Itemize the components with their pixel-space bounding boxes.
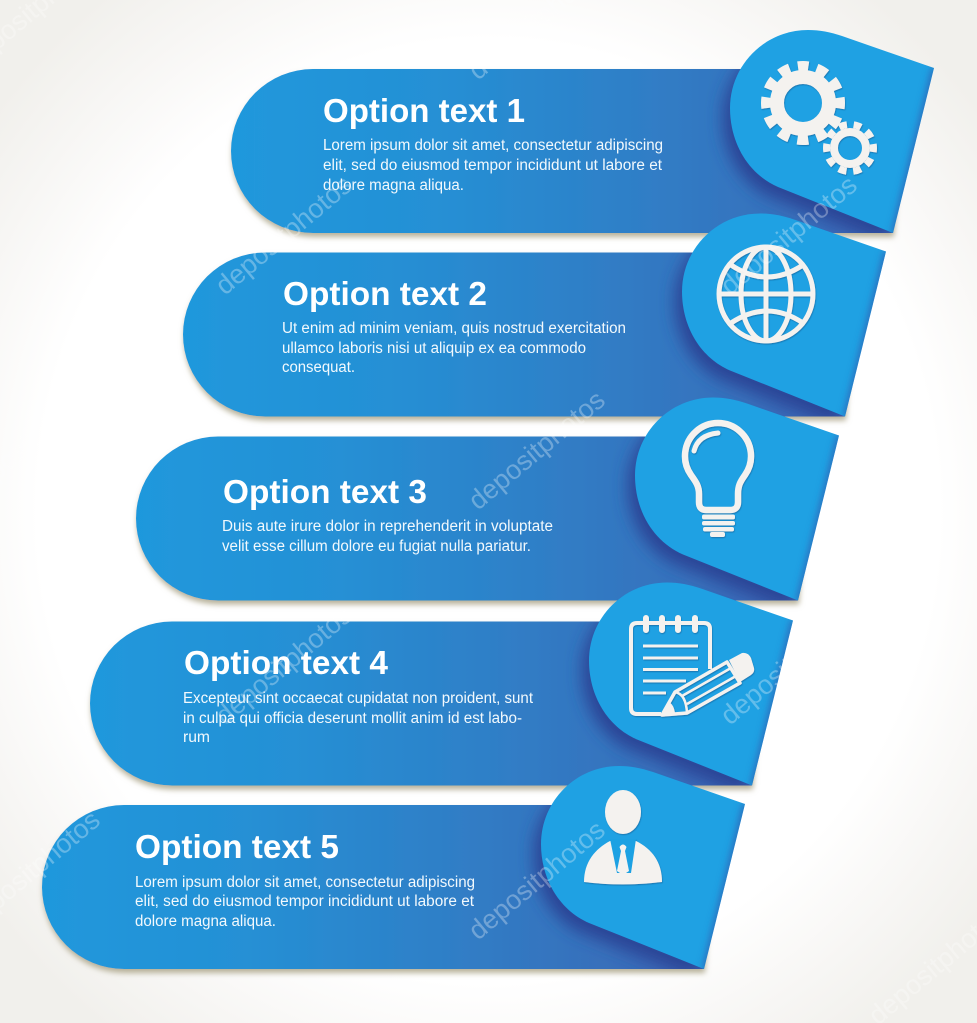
ribbon and tag 2: [183, 214, 888, 426]
body text 1: dolore magna aliqua.: [323, 177, 464, 194]
body text 4: rum: [183, 729, 210, 746]
body text 5: elit, sed do eiusmod tempor incididunt ut labore et: [135, 893, 475, 910]
body text 2: Ut enim ad minim veniam, quis nostrud exercitation: [282, 320, 626, 337]
body text 5: dolore magna aliqua.: [135, 913, 276, 930]
title 1: Option text 1: [323, 92, 525, 129]
title 4: Option text 4: [184, 644, 389, 681]
row 1: option text 1: [231, 30, 936, 243]
title 5: Option text 5: [135, 828, 339, 865]
body text 1: [323, 137, 663, 194]
body text 5: Lorem ipsum dolor sit amet, consectetur adipiscing: [135, 874, 475, 891]
body text 3: velit esse cillum dolore eu fugiat nulla pariatur.: [222, 538, 531, 555]
body text 2: consequat.: [282, 359, 355, 376]
body text 1: elit, sed do eiusmod tempor incididunt ut labore et: [323, 157, 663, 174]
title 3: Option text 3: [223, 473, 427, 510]
body text 4: in culpa qui officia deserunt mollit anim id est labo-: [183, 710, 522, 727]
row 2: option text 2: [183, 214, 888, 426]
body text 3: Duis aute irure dolor in reprehenderit in voluptate: [222, 518, 553, 535]
body text 4: Excepteur sint occaecat cupidatat non proident, sunt: [183, 690, 534, 707]
icon: notepad and pencil: [631, 618, 754, 716]
watermarks: depositphotos: [210, 170, 358, 301]
title 2: Option text 2: [283, 275, 487, 312]
ribbon and tag 1: [231, 30, 936, 243]
body text 3: [222, 518, 553, 555]
watermarks: depositphotos: [715, 600, 863, 731]
body text 2: [282, 320, 626, 376]
row 3: option text 3: [136, 398, 841, 610]
icon: businessman: [584, 790, 662, 884]
body text 5: [135, 874, 475, 930]
watermarks: depositphotos: [210, 600, 358, 731]
icon: gears: [766, 66, 880, 178]
watermarks: depositphotos: [715, 170, 863, 301]
icon: globe: [719, 247, 813, 341]
ribbon and tag 3: [136, 398, 841, 610]
body text 4: [183, 690, 534, 746]
ribbon and tag 5: [42, 766, 747, 979]
icon: light bulb: [685, 423, 751, 537]
row 4: option text 4: [90, 582, 795, 796]
body text 2: ullamco laboris nisi ut aliquip ex ea commodo: [282, 340, 586, 357]
body text 1: Lorem ipsum dolor sit amet, consectetur adipiscing: [323, 137, 663, 154]
watermarks: depositphotos: [463, 385, 611, 516]
ribbon and tag 4: [90, 582, 795, 796]
watermarks: depositphotos: [463, 815, 611, 946]
row 5: option text 5: [42, 766, 747, 979]
